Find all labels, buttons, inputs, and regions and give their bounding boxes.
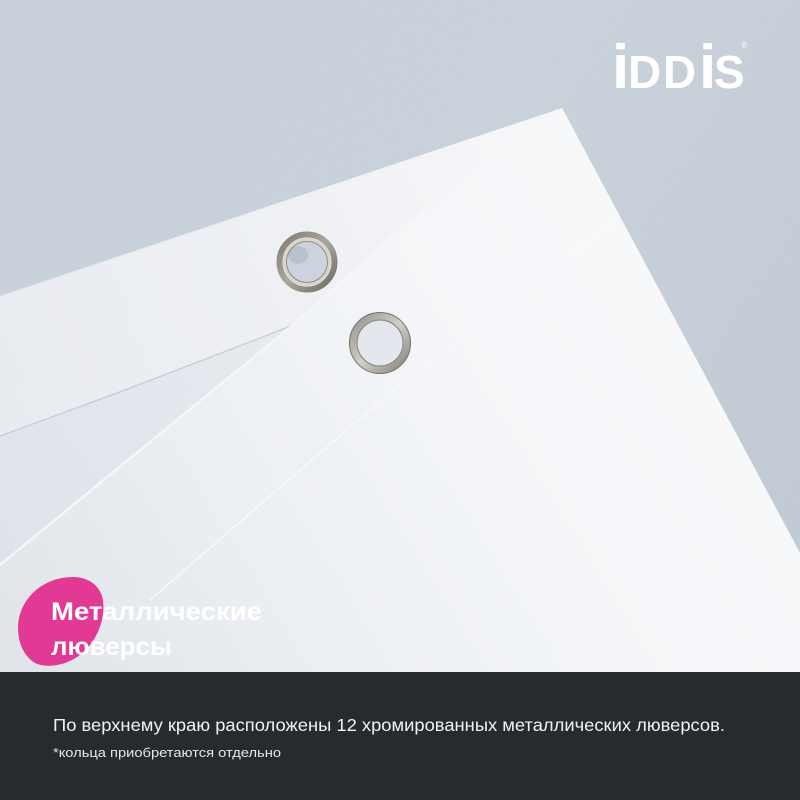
panel: white curtain fabric	[0, 108, 800, 672]
fabric: left flap under the fold	[0, 325, 293, 565]
logo: IDDIS: D	[628, 46, 661, 98]
icon: upper metal grommet	[280, 234, 334, 290]
icon: pink blob	[18, 577, 103, 666]
fabric: front panel	[0, 108, 800, 672]
logo: IDDIS: S	[714, 46, 745, 98]
fold shadow line	[0, 325, 293, 436]
heading: Металлические люверсы: Металлические	[51, 598, 262, 626]
heading: Металлические люверсы: люверсы	[51, 633, 172, 661]
logo: IDDIS: D	[663, 46, 696, 98]
logo: IDDIS: i	[612, 33, 629, 102]
logo: IDDIS	[612, 33, 748, 102]
fabric: top hem	[0, 108, 800, 672]
icon: lower metal grommet	[350, 312, 410, 374]
fold highlight line	[0, 110, 557, 565]
text block: description: По верхнему краю расположены 12 хромированных металлических люверсов.	[53, 715, 725, 735]
heading: Металлические люверсы	[51, 598, 262, 661]
text block: footnote: *кольца приобретаются отдельно	[53, 745, 281, 760]
logo: IDDIS: ®	[741, 40, 748, 50]
stitch line	[150, 220, 617, 600]
footer band	[0, 672, 800, 800]
logo: IDDIS: i	[699, 33, 716, 102]
